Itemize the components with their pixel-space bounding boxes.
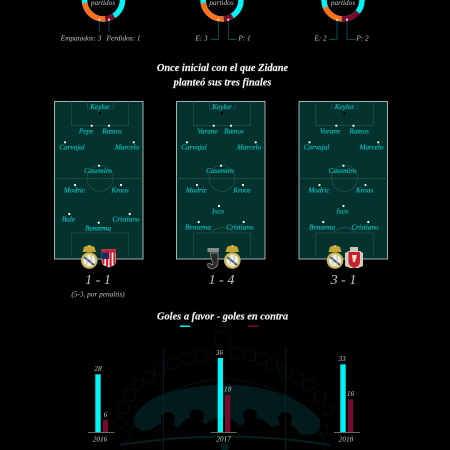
donut: 2017 results: E: 3: [194, 34, 208, 42]
panel: lineup 2017 final: Casemiro: [206, 167, 234, 175]
panel: lineup 2017 final: Varane: [197, 128, 218, 136]
panel: lineup 2018 final: Ramos: [348, 128, 369, 136]
panel: lineup 2018 final: Keylor: [334, 103, 354, 111]
panel: lineup 2016 final: Kroos: [110, 186, 129, 194]
panel: lineup 2017 final: Isco: [211, 208, 224, 216]
panel: lineup 2016 final: Pepe: [78, 128, 94, 136]
panel: lineup 2018 final: Kroos: [355, 186, 373, 194]
panel: lineup 2016 final: Casemiro: [84, 167, 112, 175]
panel: lineup 2016 final: Carvajal: [59, 144, 85, 152]
heading: lineups: Once inicial con el que Zidane: [157, 63, 289, 74]
panel: lineup 2018 final: Varane: [320, 128, 341, 136]
background crest watermark: [114, 332, 334, 450]
legend: goals for and against: [180, 326, 258, 327]
bar chart: 2016 goals: [88, 364, 114, 444]
heading: lineups: planteó sus tres finales: [173, 78, 271, 88]
donut: 2018 results: [313, 0, 370, 43]
bar chart: 2016 goals: 6: [104, 410, 108, 419]
panel: lineup 2016 final: Keylor: [89, 103, 110, 111]
donut: 2016 results: [60, 0, 140, 42]
panel: lineup 2017 final: Marcelo: [236, 144, 261, 152]
panel: lineup 2017 final: Keylor: [211, 103, 232, 111]
panel: lineup 2018 final: Casemiro: [329, 167, 357, 175]
bar chart: 2018 goals: 16: [347, 389, 354, 398]
bar chart: 2018 goals: 33: [337, 354, 346, 363]
panel: lineup 2017 final: [176, 102, 265, 259]
icon: Real Madrid crest: [224, 245, 241, 269]
donut: 2016 results: Empatados: 3: [60, 34, 102, 42]
bar chart: 2018 goals: 2018: [339, 434, 354, 444]
panel: lineup 2016 final: [54, 102, 143, 259]
bar chart: 2017 goals: 36: [215, 348, 224, 357]
score: 2016 final: 1 - 1: [85, 273, 111, 288]
panel: lineup 2018 final: [299, 102, 388, 259]
icon: Liverpool crest: [345, 247, 363, 268]
panel: lineup 2016 final: Bale: [62, 216, 76, 224]
score: 2017 final: 1 - 4: [209, 273, 234, 288]
donut: 2018 results: P: 2: [355, 34, 369, 42]
panel: lineup 2016 final: Ramos: [101, 128, 122, 136]
panel: lineup 2017 final: Ramos: [223, 128, 244, 136]
bar chart: 2016 goals: 2016: [93, 434, 108, 444]
panel: lineup 2017 final: Benzema: [185, 224, 211, 232]
panel: lineup 2016 final: Marcelo: [114, 144, 139, 152]
score: 2016 final: [71, 273, 125, 298]
panel: lineup 2018 final: Isco: [336, 208, 349, 216]
panel: lineup 2017 final: Cristiano: [226, 224, 254, 232]
donut: 2016 results: Perdidos: 1: [106, 34, 140, 42]
donut: 2018 results: E: 2: [313, 34, 327, 42]
heading: goals: Goles a favor - goles en contra: [157, 312, 288, 322]
panel: lineup 2017 final: Kroos: [232, 186, 251, 194]
panel: lineup 2018 final: Carvajal: [304, 144, 329, 152]
icon: Atletico Madrid crest: [102, 249, 116, 268]
bar chart: 2017 goals: [211, 348, 237, 444]
bar chart: 2017 goals: 18: [224, 384, 232, 394]
panel: lineup 2018 final: Benzema: [309, 224, 335, 232]
donut: 2017 results: [194, 0, 251, 42]
icon: Real Madrid crest: [81, 245, 98, 269]
score: 2016 final: (5-3, por penaltis): [71, 290, 125, 298]
bar chart: 2017 goals: 2017: [216, 434, 231, 444]
panel: lineup 2016 final: Cristiano: [112, 216, 140, 224]
panel: lineup 2018 final: Modric: [307, 186, 330, 194]
icon: Real Madrid crest: [327, 245, 343, 269]
panel: lineup 2018 final: Marcelo: [358, 144, 384, 152]
bar chart: 2016 goals: 28: [94, 364, 102, 373]
heading: lineups: [157, 63, 289, 88]
donut: 2017 results: P: 1: [237, 34, 251, 42]
panel: lineup 2017 final: Modric: [185, 186, 208, 194]
panel: lineup 2016 final: Modric: [63, 186, 86, 194]
panel: lineup 2018 final: Cristiano: [351, 224, 379, 232]
score: 2018 final: 3 - 1: [330, 273, 356, 288]
bar chart: 2018 goals: [334, 354, 360, 444]
icon: Juventus crest: [208, 248, 219, 269]
panel: lineup 2017 final: Carvajal: [181, 144, 207, 152]
panel: lineup 2016 final: Benzema: [85, 224, 111, 232]
